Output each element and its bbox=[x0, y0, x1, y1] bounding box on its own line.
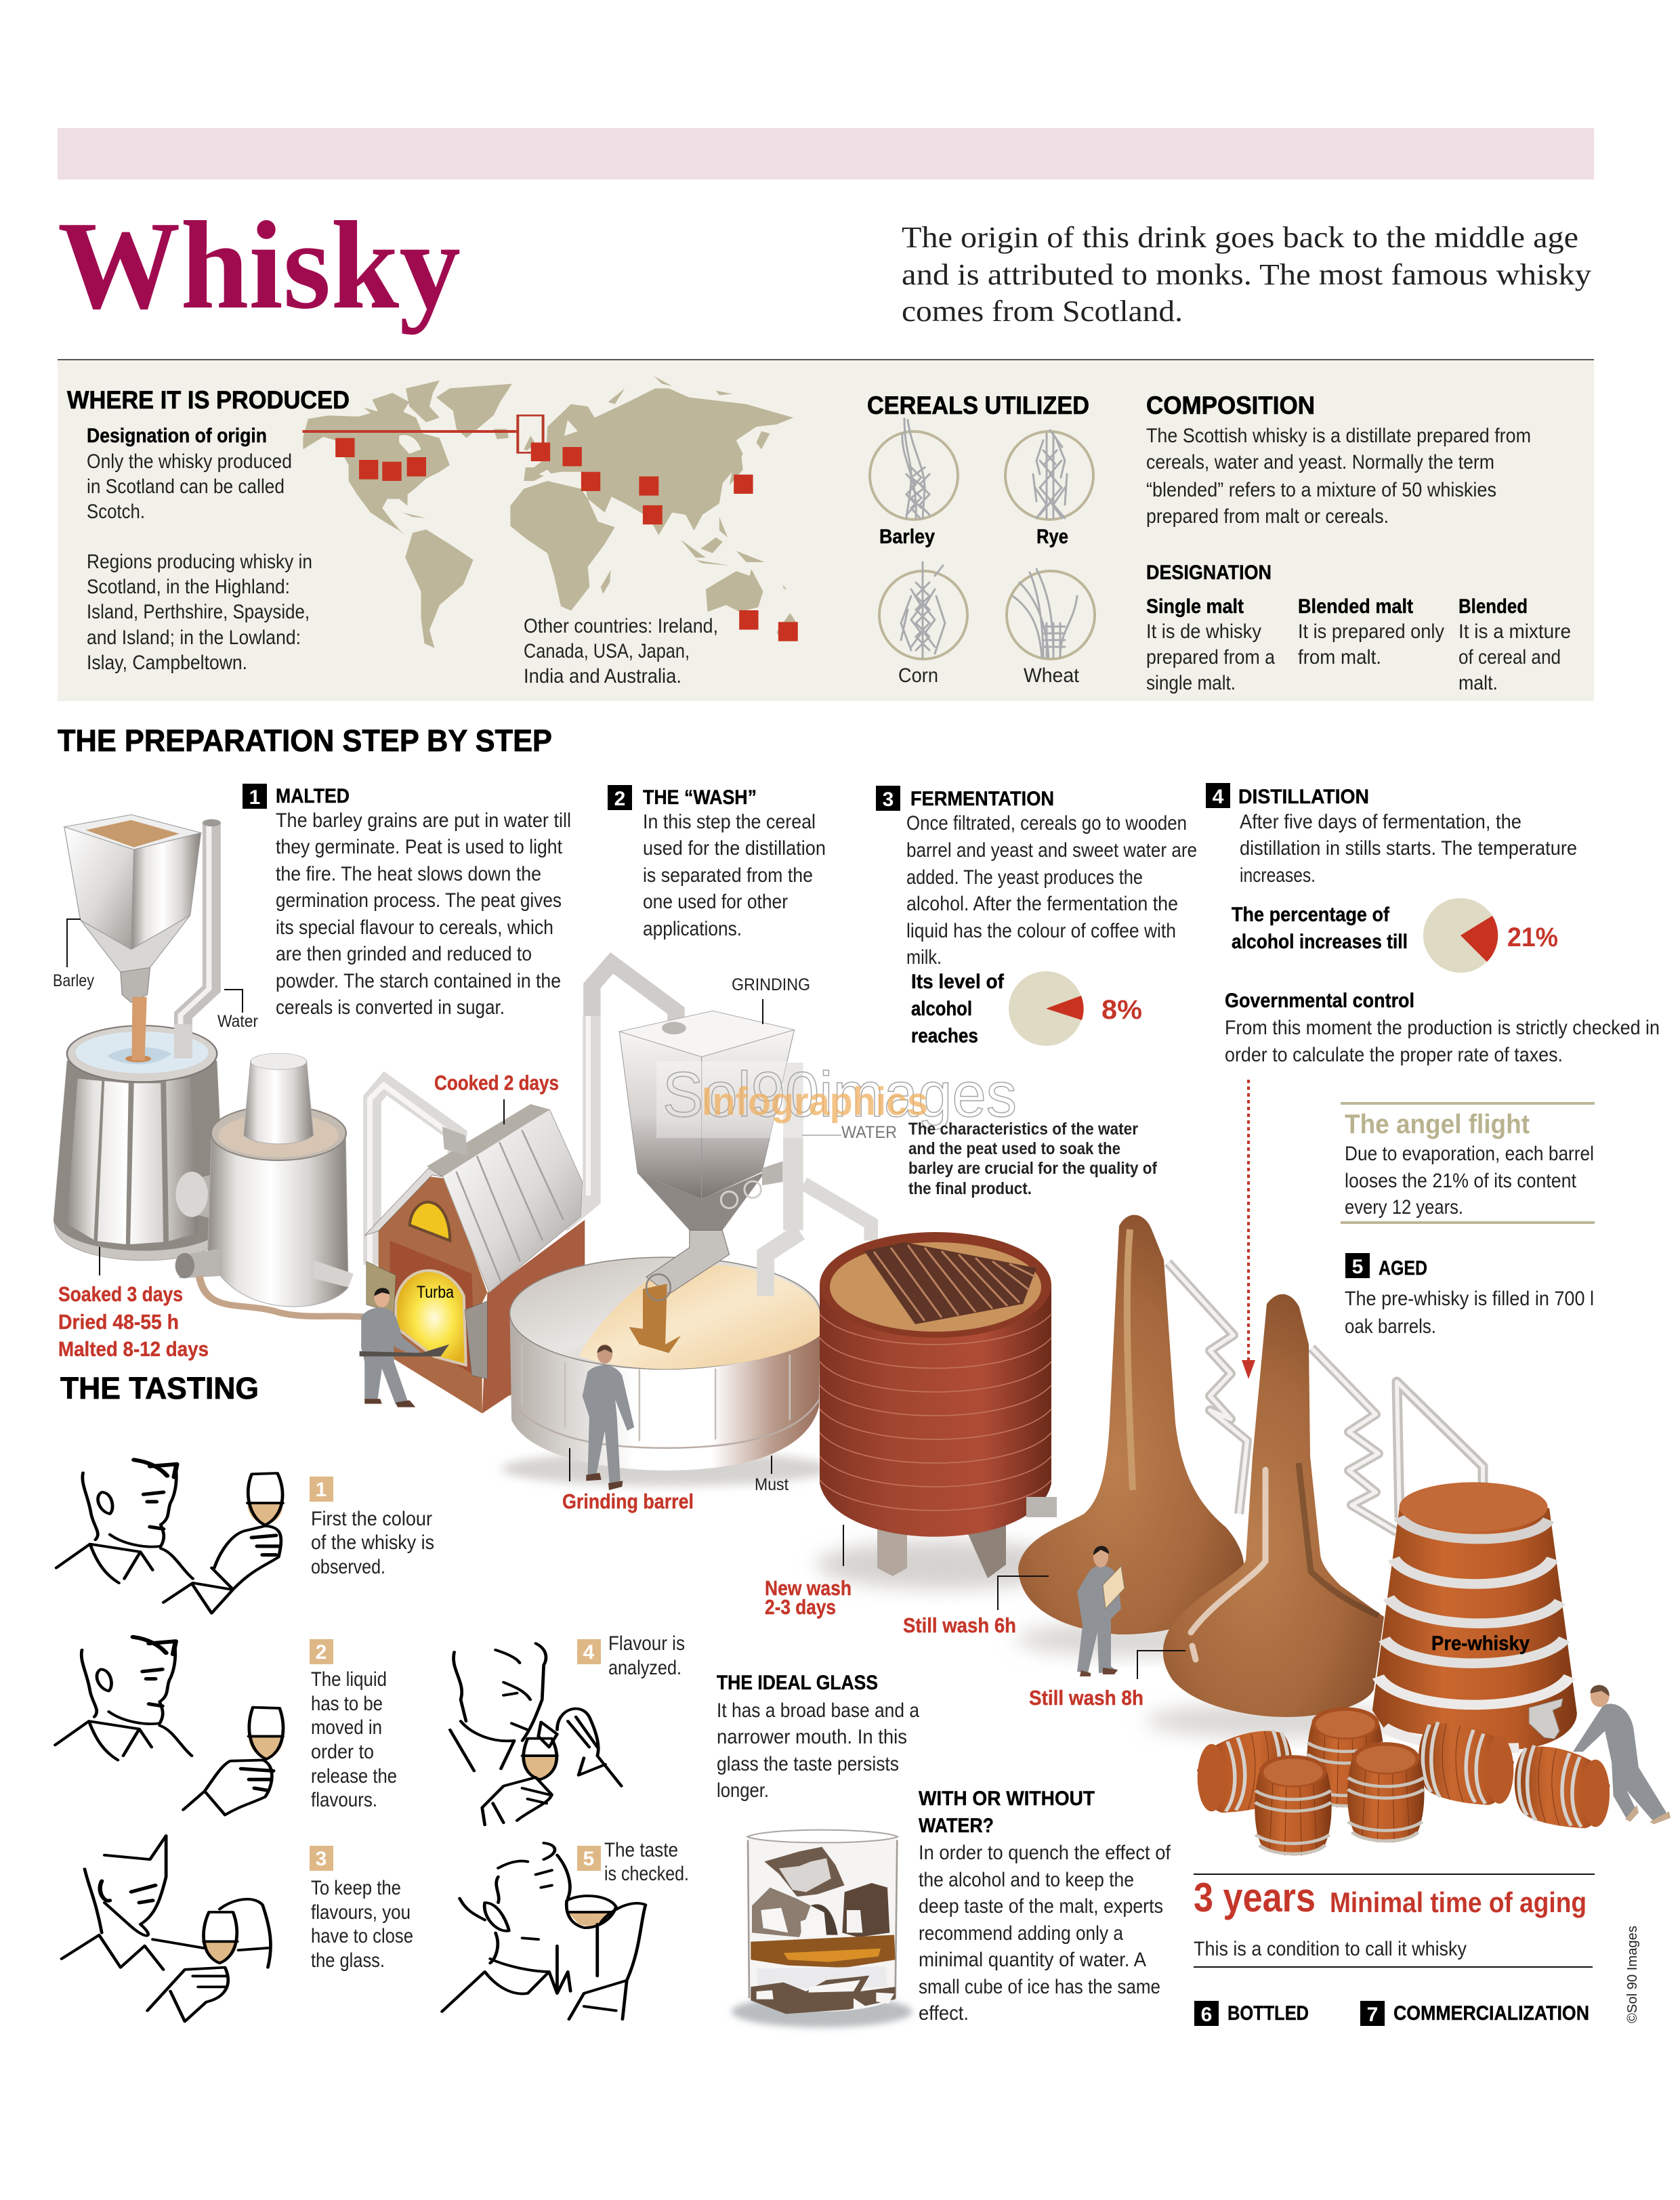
text: designation of origin: Regions producing whisky in bbox=[87, 551, 312, 573]
icon: corn bbox=[879, 562, 967, 659]
producer squares bbox=[335, 438, 798, 641]
pre-whisky barrel bbox=[1372, 1482, 1577, 1749]
pie chart: 21% bbox=[1423, 898, 1498, 973]
step 3: fermentation: Once filtrated, cereals go to wooden bbox=[906, 812, 1187, 834]
text: the ideal glass: longer. bbox=[717, 1779, 769, 1802]
label: barley: Barley bbox=[879, 526, 935, 548]
figure: inspector with clipboard bbox=[1077, 1546, 1125, 1676]
step 1: malted bbox=[243, 784, 571, 1019]
note: water and peat bbox=[841, 1120, 1158, 1198]
step 6: bottled: 6 bbox=[1201, 2004, 1212, 2026]
labels: process annotations: Malted 8-12 days bbox=[58, 1337, 209, 1361]
heading: composition: COMPOSITION bbox=[1146, 392, 1315, 419]
heading: where it is produced: WHERE IT IS PRODUCED bbox=[67, 386, 350, 414]
step 1: malted: the fire. The heat slows down the bbox=[276, 863, 541, 885]
step 1: malted: 1 bbox=[249, 786, 260, 809]
panel: the angel flight: Due to evaporation, each barrel bbox=[1345, 1143, 1594, 1165]
small barrels bbox=[1307, 1707, 1384, 1808]
text: other countries: Canada, USA, Japan, bbox=[524, 640, 690, 662]
text: with or without water: WATER? bbox=[919, 1815, 994, 1837]
heading: cereals utilized: CEREALS UTILIZED bbox=[867, 392, 1089, 419]
labels: process annotations: Cooked 2 days bbox=[434, 1071, 559, 1095]
illustration: kiln and grinding barrel bbox=[360, 1011, 871, 1490]
figure: kiln worker bbox=[360, 1288, 449, 1408]
tasting step 5 bbox=[577, 1839, 689, 1885]
figure: smelling the flavour bbox=[450, 1643, 621, 1825]
column: blended malt bbox=[1298, 595, 1444, 669]
callout: minimal aging bbox=[1194, 1874, 1595, 1968]
heading: designation: DESIGNATION bbox=[1146, 562, 1272, 584]
text: designation of origin: and Island; in the Lowland: bbox=[87, 627, 301, 649]
panel: the angel flight bbox=[1341, 1102, 1595, 1224]
note: water and peat: the final product. bbox=[908, 1179, 1032, 1198]
tasting step 2: flavours. bbox=[311, 1789, 377, 1811]
tasting step 4: Flavour is bbox=[608, 1632, 685, 1655]
callout: alcohol level 8%: Its level of bbox=[911, 971, 1005, 993]
text: with or without water: WITH OR WITHOUT bbox=[919, 1788, 1095, 1810]
text: governmental control: Governmental control bbox=[1225, 990, 1414, 1012]
tasting step 3: flavours, you bbox=[311, 1901, 411, 1924]
illustration: barrels and worker bbox=[1197, 1482, 1671, 1855]
tasting step 4 bbox=[577, 1632, 685, 1679]
text: other countries: Other countries: Ireland, bbox=[524, 615, 718, 637]
text: the ideal glass: glass the taste persists bbox=[717, 1753, 899, 1775]
label: wheat: Wheat bbox=[1024, 664, 1080, 687]
tasting step 5: 5 bbox=[583, 1848, 594, 1870]
callout: minimal aging: 3 years bbox=[1194, 1875, 1316, 1920]
text: composition: prepared from malt or cereals. bbox=[1146, 505, 1389, 528]
labels: process annotations: Pre-whisky bbox=[1431, 1632, 1530, 1655]
tasting step 2: order to bbox=[311, 1741, 374, 1763]
step 2: the wash: THE “WASH” bbox=[643, 786, 757, 809]
tasting step 4: 4 bbox=[583, 1641, 595, 1664]
icon: barley bbox=[870, 419, 958, 520]
step 1: malted: germination process. The peat gives bbox=[276, 889, 562, 912]
scotland locator bbox=[302, 415, 543, 452]
grain stream bbox=[132, 997, 147, 1061]
step 3: fermentation: barrel and yeast and sweet water are bbox=[906, 839, 1197, 862]
icon: rye bbox=[1005, 430, 1093, 520]
text: composition: The Scottish whisky is a distillate prepared from bbox=[1146, 425, 1531, 447]
kiln building bbox=[364, 1104, 585, 1414]
step 5: aged bbox=[1345, 1253, 1594, 1338]
text: other countries: India and Australia. bbox=[524, 665, 681, 688]
callout: alcohol percentage 21%: The percentage of bbox=[1232, 904, 1390, 926]
labels: process annotations: Barley bbox=[53, 971, 94, 990]
tasting step 3 bbox=[310, 1846, 413, 1972]
step 4: distillation: increases. bbox=[1240, 864, 1316, 887]
step 1: malted: its special flavour to cereals, which bbox=[276, 916, 553, 939]
text: governmental control bbox=[1225, 990, 1660, 1066]
tasting step 1: observed. bbox=[311, 1556, 385, 1578]
column: blended: Blended bbox=[1458, 595, 1528, 618]
step 7: commercialization: 7 bbox=[1367, 2004, 1378, 2026]
figure: man rolling barrel bbox=[1573, 1685, 1671, 1824]
note: water and peat: barley are crucial for the quality of bbox=[908, 1159, 1158, 1178]
step 5: aged: 5 bbox=[1352, 1256, 1363, 1278]
labels: process annotations: GRINDING bbox=[732, 975, 810, 994]
callout: minimal aging: Minimal time of aging bbox=[1330, 1886, 1587, 1918]
tasting step 3: the glass. bbox=[311, 1949, 385, 1972]
text: with or without water: effect. bbox=[919, 2002, 969, 2025]
conical mill bbox=[175, 1053, 364, 1317]
step 3: fermentation: alcohol. After the fermentation the bbox=[906, 893, 1178, 915]
callout: alcohol percentage 21%: 21% bbox=[1507, 923, 1558, 952]
tasting step 4: analyzed. bbox=[608, 1657, 681, 1679]
step 3: fermentation bbox=[876, 786, 1197, 969]
barrel tap bbox=[1529, 1699, 1563, 1739]
labels: process annotations: Still wash 8h bbox=[1029, 1686, 1143, 1710]
step 2: the wash: applications. bbox=[643, 918, 742, 940]
callout: minimal aging: This is a condition to call it whisky bbox=[1194, 1938, 1467, 1960]
grinding hopper bbox=[619, 1011, 794, 1230]
tasting step 2: release the bbox=[311, 1765, 397, 1788]
step 4: distillation bbox=[1206, 783, 1577, 887]
labels: process annotations: Still wash 6h bbox=[903, 1613, 1016, 1637]
column: blended: of cereal and bbox=[1458, 646, 1561, 669]
tasting step 2 bbox=[310, 1639, 397, 1811]
panel: overview bbox=[58, 359, 1594, 701]
step 2: the wash: one used for other bbox=[643, 891, 788, 913]
labels: process annotations: Must bbox=[755, 1475, 789, 1494]
watermark: Infographics bbox=[702, 1080, 928, 1124]
tasting step 3: 3 bbox=[316, 1848, 327, 1870]
top band bbox=[58, 128, 1594, 179]
tasting step 2: 2 bbox=[316, 1641, 327, 1664]
grinding barrel bbox=[501, 1230, 833, 1486]
step 1: malted: powder. The starch contained in the bbox=[276, 970, 561, 992]
tasting step 2: has to be bbox=[311, 1693, 383, 1715]
text: with or without water: small cube of ice has the same bbox=[919, 1976, 1160, 1998]
tasting step 1: of the whisky is bbox=[311, 1531, 434, 1554]
pie chart: 8% bbox=[1009, 971, 1084, 1046]
tasting step 3: To keep the bbox=[311, 1877, 401, 1899]
text: the ideal glass: THE IDEAL GLASS bbox=[717, 1672, 878, 1694]
step 4: distillation: DISTILLATION bbox=[1238, 786, 1369, 808]
tasting step 1 bbox=[310, 1477, 434, 1578]
callout: alcohol level 8%: 8% bbox=[1101, 995, 1142, 1025]
tasting step 5: The taste bbox=[604, 1839, 678, 1861]
labels: process annotations: Water bbox=[217, 1012, 258, 1031]
column: single malt bbox=[1146, 595, 1275, 694]
step 1: malted: cereals is converted in sugar. bbox=[276, 996, 505, 1019]
step 3: fermentation: milk. bbox=[906, 946, 942, 969]
column: single malt: single malt. bbox=[1146, 672, 1236, 694]
illustration: whisky glass bbox=[732, 1830, 912, 2027]
panel: the angel flight: The angel flight bbox=[1345, 1109, 1530, 1139]
text: with or without water: recommend adding only a bbox=[919, 1922, 1123, 1945]
text: designation of origin: Designation of origin bbox=[87, 425, 267, 447]
steeping tank bbox=[54, 1025, 225, 1261]
leader lines bbox=[67, 919, 1185, 1679]
column: blended malt: It is prepared only bbox=[1298, 620, 1444, 643]
text: composition: cereals, water and yeast. Normally the term bbox=[1146, 451, 1494, 473]
note: water and peat: and the peat used to soak the bbox=[908, 1139, 1120, 1158]
column: blended: It is a mixture bbox=[1458, 620, 1571, 643]
labels: process annotations: Turba bbox=[417, 1283, 454, 1302]
column: single malt: prepared from a bbox=[1146, 646, 1275, 669]
credit: ©Sol 90 Images bbox=[1625, 1926, 1640, 2023]
callout: alcohol percentage 21%: alcohol increases till bbox=[1232, 931, 1408, 953]
panel: the angel flight: every 12 years. bbox=[1345, 1196, 1463, 1219]
labels: process annotations: 2-3 days bbox=[765, 1595, 836, 1619]
step 1: malted: they germinate. Peat is used to light bbox=[276, 836, 563, 858]
figure: observing the colour bbox=[56, 1460, 283, 1613]
text: designation of origin: Scotland, in the Highland: bbox=[87, 576, 290, 598]
figure: barrel worker bbox=[583, 1345, 634, 1490]
arrow: dotted down to still bbox=[1242, 1080, 1255, 1379]
column: blended malt: from malt. bbox=[1298, 646, 1381, 669]
tasting step 5: is checked. bbox=[604, 1863, 689, 1885]
column: blended bbox=[1458, 595, 1571, 694]
illustration: copper still 2 bbox=[1145, 1294, 1483, 1738]
figure: swirling the glass bbox=[55, 1637, 283, 1815]
callout: alcohol level 8%: alcohol bbox=[911, 998, 972, 1020]
text: the ideal glass: narrower mouth. In this bbox=[717, 1726, 907, 1748]
icon: water pipe bbox=[180, 819, 221, 1056]
step 6: bottled bbox=[1194, 2001, 1309, 2026]
text: designation of origin: Scotch. bbox=[87, 501, 145, 523]
icon: wheat bbox=[1007, 569, 1095, 659]
text: composition: “blended” refers to a mixture of 50 whiskies bbox=[1146, 479, 1496, 501]
step 2: the wash: 2 bbox=[614, 788, 625, 810]
labels: process annotations: Grinding barrel bbox=[562, 1489, 694, 1513]
kiln pipes bbox=[370, 1016, 871, 1265]
tasting step 3: have to close bbox=[311, 1925, 413, 1947]
tasting step 1: 1 bbox=[316, 1479, 327, 1501]
heading: the tasting: THE TASTING bbox=[60, 1371, 259, 1405]
heading: the preparation step by step: THE PREPARATION STEP BY STEP bbox=[58, 723, 552, 758]
watermark: Sol90images bbox=[663, 1059, 1017, 1130]
illustration: fermentation vat bbox=[816, 1232, 1074, 1589]
callout: alcohol level 8%: reaches bbox=[911, 1025, 978, 1047]
text: designation of origin: Island, Perthshire, Spayside, bbox=[87, 601, 310, 623]
step 5: aged: The pre-whisky is filled in 700 l bbox=[1345, 1288, 1594, 1310]
world map bbox=[302, 376, 798, 648]
text: governmental control: order to calculate the proper rate of taxes. bbox=[1225, 1044, 1563, 1066]
tasting drawings bbox=[55, 1460, 646, 2021]
intro text bbox=[902, 221, 1591, 328]
step 2: the wash: In this step the cereal bbox=[643, 811, 816, 833]
step 4: distillation: distillation in stills starts. The temperature bbox=[1240, 837, 1577, 860]
text: with or without water: deep taste of the malt, experts bbox=[919, 1895, 1163, 1918]
step 1: malted: The barley grains are put in water till bbox=[276, 809, 571, 832]
icon: barley hopper bbox=[64, 815, 201, 1002]
step 5: aged: oak barrels. bbox=[1345, 1315, 1436, 1338]
text: designation of origin: Only the whisky produced bbox=[87, 450, 292, 473]
step 3: fermentation: liquid has the colour of coffee with bbox=[906, 920, 1176, 942]
step 6: bottled: BOTTLED bbox=[1227, 2002, 1309, 2025]
tasting step 2: The liquid bbox=[311, 1668, 387, 1691]
column: single malt: It is de whisky bbox=[1146, 620, 1261, 643]
note: water and peat: The characteristics of the water bbox=[908, 1120, 1138, 1139]
step 2: the wash: used for the distillation bbox=[643, 837, 826, 860]
whisky pour bbox=[629, 1284, 681, 1353]
tasting step 2: moved in bbox=[311, 1716, 382, 1739]
step 3: fermentation: added. The yeast produces the bbox=[906, 866, 1143, 889]
label: rye: Rye bbox=[1036, 526, 1068, 548]
step 4: distillation: After five days of fermentation, the bbox=[1240, 811, 1521, 833]
column: blended malt: Blended malt bbox=[1298, 595, 1413, 618]
column: single malt: Single malt bbox=[1146, 595, 1244, 618]
text: designation of origin bbox=[87, 425, 312, 674]
text: other countries bbox=[524, 615, 718, 688]
text: composition bbox=[1146, 425, 1531, 528]
text: with or without water: the alcohol and to keep the bbox=[919, 1869, 1134, 1891]
text: the ideal glass: It has a broad base and a bbox=[717, 1699, 919, 1722]
step 3: fermentation: FERMENTATION bbox=[910, 788, 1054, 810]
step 1: malted: are then grinded and reduced to bbox=[276, 943, 532, 965]
figure: covering the glass bbox=[62, 1836, 271, 2021]
step 1: malted: MALTED bbox=[276, 785, 350, 807]
step 2: the wash: is separated from the bbox=[643, 864, 813, 887]
intro text: The origin of this drink goes back to the middle age bbox=[902, 221, 1578, 254]
step 7: commercialization bbox=[1360, 2001, 1589, 2026]
illustration: copper still 1 bbox=[1016, 1215, 1247, 1657]
label: corn: Corn bbox=[898, 664, 938, 687]
labels: process annotations bbox=[53, 971, 1530, 1710]
step 5: aged: AGED bbox=[1379, 1257, 1427, 1279]
intro text: comes from Scotland. bbox=[902, 295, 1183, 328]
tasting step 1: First the colour bbox=[311, 1508, 432, 1530]
panel: the angel flight: looses the 21% of its content bbox=[1345, 1170, 1577, 1192]
step 7: commercialization: COMMERCIALIZATION bbox=[1393, 2002, 1589, 2025]
text: with or without water bbox=[919, 1788, 1171, 2025]
step 3: fermentation: 3 bbox=[883, 788, 894, 811]
column: blended: malt. bbox=[1458, 672, 1498, 694]
step 4: distillation: 4 bbox=[1213, 786, 1224, 808]
callout: alcohol level 8% bbox=[911, 971, 1142, 1047]
text: the ideal glass bbox=[717, 1672, 919, 1802]
labels: process annotations: New wash bbox=[765, 1576, 852, 1600]
title: Whisky bbox=[58, 196, 461, 335]
callout: alcohol percentage 21% bbox=[1232, 898, 1558, 973]
text: designation of origin: in Scotland can be called bbox=[87, 475, 285, 498]
text: with or without water: In order to quench the effect of bbox=[919, 1842, 1171, 1864]
intro text: and is attributed to monks. The most famous whisky bbox=[902, 258, 1591, 291]
upper pipe to grinder bbox=[592, 963, 676, 1187]
labels: process annotations: Soaked 3 days bbox=[58, 1282, 183, 1306]
figure: tasting bbox=[442, 1843, 646, 2019]
text: with or without water: minimal quantity of water. A bbox=[919, 1949, 1146, 1971]
right elbow pipe bbox=[765, 1232, 800, 1296]
labels: process annotations: Dried 48-55 h bbox=[58, 1310, 179, 1334]
step 2: the wash bbox=[608, 785, 826, 940]
text: designation of origin: Islay, Campbeltown. bbox=[87, 652, 247, 674]
note: water and peat: WATER bbox=[841, 1123, 897, 1142]
illustration: steeping equipment bbox=[54, 815, 676, 1317]
